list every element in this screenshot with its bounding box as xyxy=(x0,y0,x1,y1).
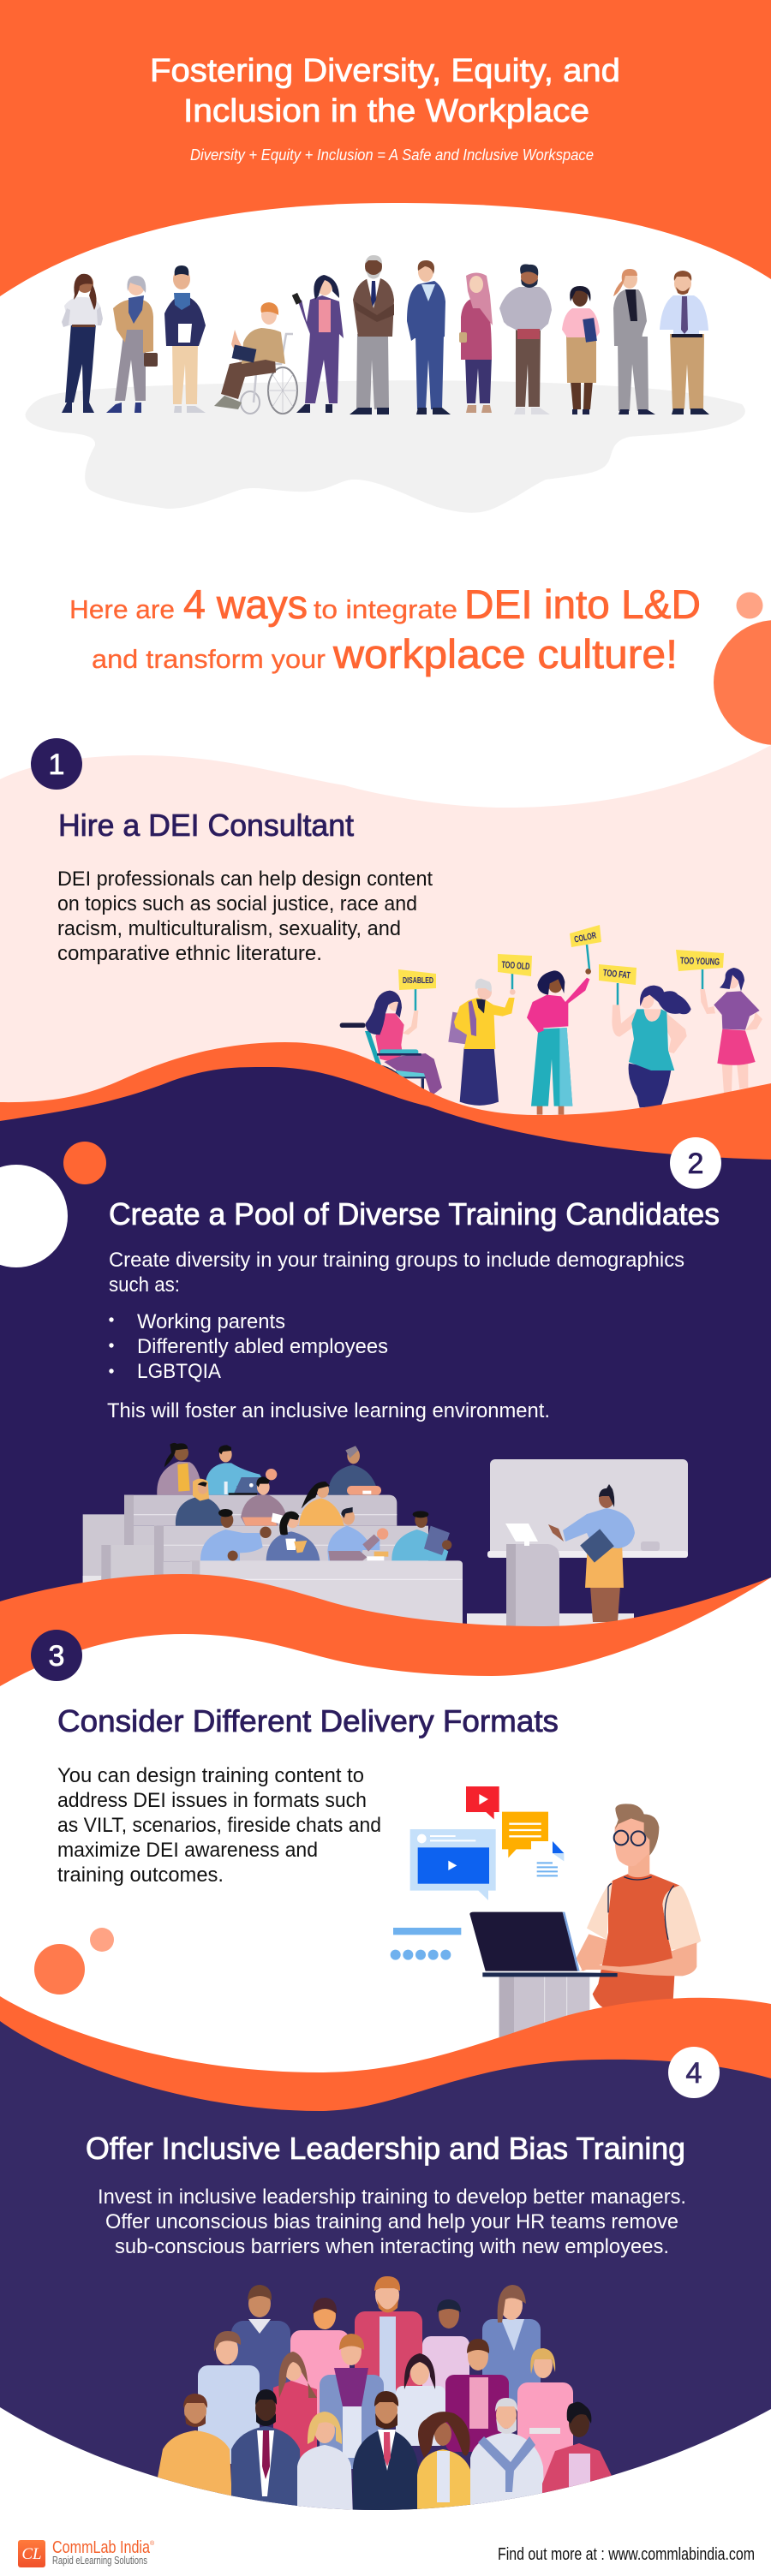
header banner xyxy=(0,0,771,548)
illustration: diverse employees xyxy=(62,255,709,414)
body text 1: DEI professionals can help design content xyxy=(57,868,433,891)
body text 1: comparative ethnic literature. xyxy=(57,942,322,965)
woman in pink top xyxy=(527,969,591,1115)
person 1 xyxy=(62,274,103,413)
back row students xyxy=(157,1443,381,1495)
heading: 4 ways: 4 ways xyxy=(183,581,308,627)
lecture steps xyxy=(83,1495,463,1638)
person 8 xyxy=(459,272,493,413)
heading: 4 ways xyxy=(69,581,701,677)
woman in wheelchair xyxy=(340,991,442,1096)
middle row students xyxy=(176,1476,344,1526)
decorative circle large xyxy=(34,1944,85,1995)
icon: yellow chat bubble xyxy=(502,1812,548,1857)
person 11 xyxy=(613,269,655,414)
number badge 3 xyxy=(31,1630,82,1681)
illustration: women with placards xyxy=(340,925,762,1115)
body text 2 xyxy=(107,1249,684,1422)
placard: color: COLOR xyxy=(573,930,597,945)
woman in teal top xyxy=(612,986,691,1107)
placard sticks xyxy=(415,945,702,1011)
person 12 xyxy=(660,271,709,414)
body text 1: on topics such as social justice, race and xyxy=(57,892,417,915)
person 10 xyxy=(562,286,600,414)
bullet list: LGBTQIA xyxy=(137,1360,221,1383)
footer logo xyxy=(18,2538,155,2567)
decorative circle white xyxy=(0,1165,68,1267)
decorative circle small xyxy=(90,1928,114,1952)
person 6 xyxy=(350,255,394,414)
body text 3: training outcomes. xyxy=(57,1863,224,1887)
body text 2: such as: xyxy=(109,1273,180,1297)
body text 3: You can design training content to xyxy=(57,1764,364,1787)
heading: 4 ways: workplace culture! xyxy=(332,631,678,677)
heading 1: Hire a DEI Consultant xyxy=(58,808,354,843)
placard: too young: TOO YOUNG xyxy=(680,956,720,968)
body text 2: This will foster an inclusive learning environment. xyxy=(107,1399,550,1422)
body text 2: Create diversity in your training groups to include demographics xyxy=(109,1249,684,1272)
body text 4: Offer unconscious bias training and help your HR teams remove xyxy=(105,2210,678,2233)
icon: video panel xyxy=(410,1829,496,1900)
panel: step 2 xyxy=(0,1067,771,1696)
heading 2: Create a Pool of Diverse Training Candidates xyxy=(109,1196,720,1231)
person 9 xyxy=(499,264,552,414)
footer logo: CommLab India xyxy=(52,2538,151,2557)
orange wave 3 xyxy=(0,1574,771,1713)
heading: 4 ways: DEI into L&D xyxy=(464,581,701,627)
illustration: learner at laptop xyxy=(391,1786,701,2055)
lectern xyxy=(505,1524,559,1626)
placard: too old xyxy=(498,954,532,976)
lectern xyxy=(499,1977,589,2055)
number badge 3: 3 xyxy=(49,1640,64,1673)
icon: red video bubble xyxy=(466,1786,499,1819)
footer logo: CL xyxy=(21,2545,42,2563)
person 3 xyxy=(164,265,206,413)
placard: color xyxy=(570,925,601,947)
person 5 xyxy=(292,275,344,413)
title xyxy=(150,53,620,129)
title: Fostering Diversity, Equity, and xyxy=(150,53,620,89)
password field xyxy=(391,1928,461,1960)
number badge 1 xyxy=(31,738,82,790)
heading 4: Offer Inclusive Leadership and Bias Training xyxy=(86,2131,685,2166)
panel: step 4 xyxy=(0,2021,771,2518)
decorative circle large xyxy=(714,620,771,745)
floor xyxy=(467,1613,634,1627)
placard: too fat: TOO FAT xyxy=(602,968,631,981)
body text 4: sub-conscious barriers when interacting with new employees. xyxy=(115,2235,669,2258)
footer logo: Rapid eLearning Solutions xyxy=(52,2555,147,2567)
body text 1: racism, multiculturalism, sexuality, and xyxy=(57,917,401,940)
number badge 4: 4 xyxy=(686,2057,702,2090)
person 4 wheelchair xyxy=(214,302,297,414)
woman in purple top xyxy=(700,968,762,1094)
presenter xyxy=(548,1484,635,1622)
panel: step 1 xyxy=(0,738,771,1199)
person 7 xyxy=(407,260,451,414)
body text 3: maximize DEI awareness and xyxy=(57,1839,318,1862)
body text 3: address DEI issues in formats such xyxy=(57,1789,367,1812)
front row xyxy=(152,2389,613,2518)
person 2 xyxy=(106,276,158,413)
footer logo: ® xyxy=(150,2540,155,2547)
bullet list: Working parents xyxy=(137,1310,285,1333)
heading: 4 ways: Here are xyxy=(69,594,175,624)
person xyxy=(577,1804,701,2010)
body text 4 xyxy=(98,2185,686,2258)
number badge 4 xyxy=(668,2047,720,2098)
decorative circle orange xyxy=(63,1142,106,1184)
panel: step 3 xyxy=(0,1577,771,2124)
number badge 1: 1 xyxy=(49,748,64,781)
back row xyxy=(231,2276,541,2416)
placard: too old: TOO OLD xyxy=(501,960,530,972)
body text 3: as VILT, scenarios, fireside chats and xyxy=(57,1814,381,1837)
decorative circle small xyxy=(737,593,762,618)
body text 3 xyxy=(57,1764,381,1887)
placard: disabled: DISABLED xyxy=(403,975,433,986)
icon: document xyxy=(537,1841,564,1875)
whiteboard xyxy=(487,1459,688,1558)
heading: 4 ways: to integrate xyxy=(314,594,457,624)
heading 3: Consider Different Delivery Formats xyxy=(57,1703,559,1738)
number badge 2 xyxy=(670,1137,721,1189)
illustration: classroom xyxy=(83,1443,688,1638)
placard: too fat xyxy=(599,964,637,985)
body text 1 xyxy=(57,868,433,965)
placard: too young xyxy=(676,950,724,971)
illustration: group of people xyxy=(152,2276,613,2518)
heading: 4 ways: and transform your xyxy=(92,644,326,674)
subtitle: Diversity + Equity + Inclusion = A Safe and Inclusive Workspace xyxy=(190,146,594,164)
laptop xyxy=(469,1912,618,1977)
orange wave 1 xyxy=(0,1042,771,1216)
bullet list xyxy=(109,1310,388,1383)
placard: disabled xyxy=(398,969,436,990)
title: Inclusion in the Workplace xyxy=(183,93,589,129)
middle row xyxy=(198,2331,573,2485)
floor shadow blob xyxy=(26,380,745,513)
number badge 2: 2 xyxy=(688,1148,703,1180)
bullet list: Differently abled employees xyxy=(137,1335,388,1358)
orange wave 4 xyxy=(0,1996,771,2227)
woman in yellow jacket xyxy=(448,979,516,1106)
front row students xyxy=(200,1507,451,1561)
body text 4: Invest in inclusive leadership training to develop better managers. xyxy=(98,2185,686,2209)
